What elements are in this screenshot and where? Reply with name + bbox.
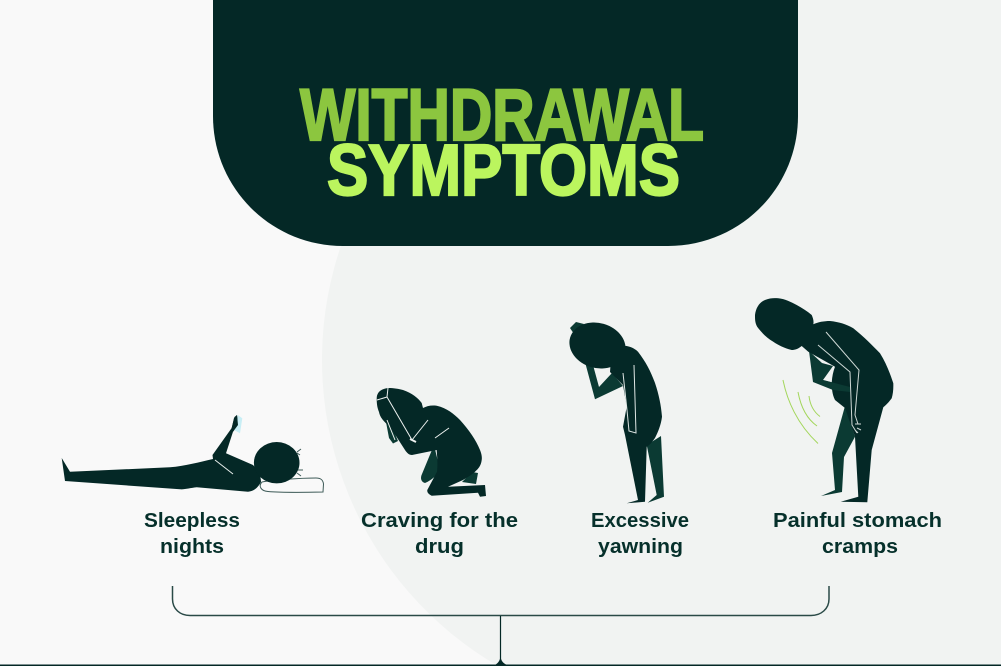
arm highlight — [215, 460, 233, 474]
label: craving for the drug: Craving for the — [361, 510, 518, 532]
label: excessive yawning: Excessive — [591, 510, 689, 532]
label: excessive yawning: yawning — [598, 536, 683, 558]
label: sleepless nights — [144, 510, 240, 558]
eyelashes — [297, 449, 303, 476]
label: painful stomach cramps — [773, 510, 942, 558]
bracket connector — [0, 586, 1001, 666]
label: sleepless nights: Sleepless — [144, 510, 240, 532]
figure: person lying awake with phone — [62, 415, 323, 492]
arm highlights — [818, 332, 861, 433]
body silhouette — [377, 388, 486, 497]
back knee and foot — [421, 445, 440, 483]
header panel — [213, 0, 798, 246]
far arm overlap — [823, 380, 850, 392]
body silhouette — [755, 298, 893, 502]
body silhouette — [62, 415, 261, 492]
title — [300, 75, 704, 211]
label: painful stomach cramps: Painful stomach — [773, 510, 942, 532]
head — [564, 316, 631, 375]
back leg — [647, 436, 664, 503]
label: sleepless nights: nights — [160, 536, 224, 558]
label: craving for the drug: drug — [415, 536, 464, 558]
head — [254, 442, 300, 483]
phone — [234, 415, 242, 433]
arm highlights — [377, 388, 449, 440]
arm highlights — [623, 365, 636, 433]
pillow — [260, 478, 324, 492]
body silhouette — [610, 345, 662, 503]
far hand — [386, 420, 398, 444]
figure: person with painful stomach cramps — [755, 298, 893, 502]
near the neck shade — [406, 424, 416, 436]
figure: person yawning, bent over — [564, 316, 664, 503]
far arm — [809, 351, 850, 392]
back leg — [821, 406, 855, 496]
background circle panel — [322, 0, 1001, 666]
raised arm — [585, 362, 623, 399]
title: WITHDRAWAL — [300, 75, 704, 156]
label: painful stomach cramps: cramps — [822, 536, 898, 558]
title: SYMPTOMS — [327, 131, 680, 211]
label: craving for the drug — [361, 510, 518, 558]
hair bump — [570, 322, 584, 334]
pain arcs — [783, 380, 820, 444]
figure: person crouching, craving — [377, 388, 486, 497]
label: excessive yawning — [591, 510, 689, 558]
